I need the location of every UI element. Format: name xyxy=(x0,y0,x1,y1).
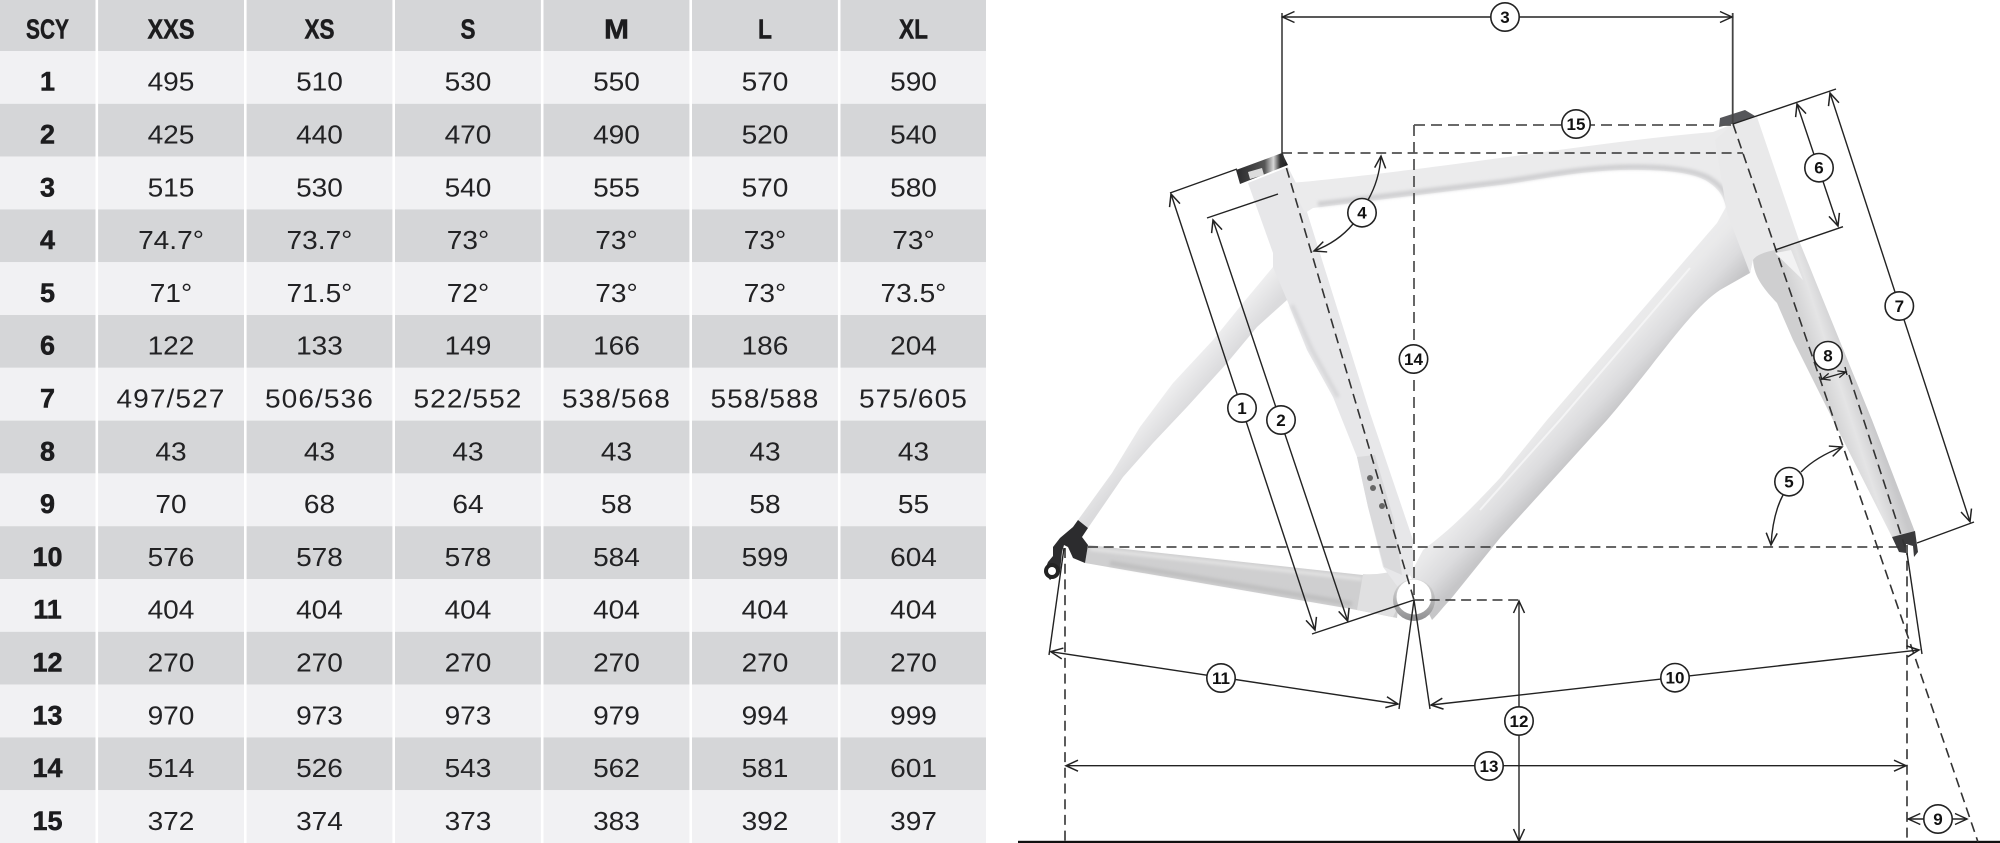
row 1: 590 xyxy=(890,68,937,96)
row 12: 270 xyxy=(148,648,194,677)
row 4: 73° xyxy=(447,226,489,255)
dimension 8 xyxy=(1814,342,1846,379)
row 14: 543 xyxy=(445,754,491,783)
fork xyxy=(1753,243,1915,537)
row 13: 999 xyxy=(890,701,937,730)
row 14: 601 xyxy=(890,754,937,783)
row 13: 970 xyxy=(148,701,194,730)
dimension 12: 12 xyxy=(1510,712,1528,731)
row 6: 133 xyxy=(296,332,343,360)
row 9: 55 xyxy=(898,490,929,519)
dimension 11: 11 xyxy=(1212,669,1230,688)
row 10: 584 xyxy=(593,543,640,572)
row 1: 530 xyxy=(445,68,491,96)
row 4 xyxy=(0,209,986,262)
row 4: 73° xyxy=(595,226,638,255)
dimension 12 xyxy=(1505,601,1533,841)
dimension 10 xyxy=(1431,650,1919,705)
row 3: 3 xyxy=(40,172,55,202)
row 10: 604 xyxy=(890,543,937,572)
row 7: 538/568 xyxy=(562,384,671,413)
header row: XL xyxy=(899,13,928,44)
row 14: 562 xyxy=(593,754,640,783)
dimension 9: 9 xyxy=(1933,810,1943,829)
dimension 13: 13 xyxy=(1480,757,1498,776)
row 12: 270 xyxy=(445,648,491,677)
row 7: 506/536 xyxy=(265,384,374,413)
row 5: 71.5° xyxy=(287,279,352,308)
row 6: 186 xyxy=(742,332,788,360)
row 7: 575/605 xyxy=(859,384,968,413)
row 15: 372 xyxy=(148,807,194,836)
chain stay xyxy=(1085,545,1402,618)
row 1: 510 xyxy=(296,68,343,96)
row 3: 555 xyxy=(593,173,640,202)
row 8: 43 xyxy=(155,437,187,466)
row 12: 12 xyxy=(32,648,63,678)
row 2: 540 xyxy=(890,120,937,149)
row 9: 68 xyxy=(304,490,335,519)
row 9: 58 xyxy=(601,490,632,519)
row 1: 550 xyxy=(593,68,640,96)
rear dropout and hanger xyxy=(1044,520,1088,580)
row 11: 404 xyxy=(890,596,937,624)
row 15: 392 xyxy=(742,807,788,836)
row 9: 70 xyxy=(155,490,187,519)
dimension 13 xyxy=(1066,752,1906,780)
row 8: 43 xyxy=(749,437,781,466)
reference dashed lines xyxy=(1065,124,1978,842)
dimension 5 xyxy=(1771,447,1842,545)
header row: L xyxy=(758,13,772,44)
row 2: 520 xyxy=(742,120,788,149)
row 11: 404 xyxy=(148,596,194,624)
row 15 xyxy=(0,790,986,843)
row 7: 522/552 xyxy=(413,384,523,413)
row 10: 10 xyxy=(32,542,63,572)
row 3: 530 xyxy=(296,173,343,202)
row 13 xyxy=(0,685,986,737)
dimension 7: 7 xyxy=(1895,297,1904,316)
dimension 14 xyxy=(1399,345,1428,373)
row 12: 270 xyxy=(890,648,937,677)
top tube xyxy=(1290,124,1760,220)
row 3: 580 xyxy=(890,173,937,202)
header row: XS xyxy=(304,13,334,44)
row 6: 149 xyxy=(445,332,491,360)
dimension 14: 14 xyxy=(1404,350,1423,369)
row 6: 122 xyxy=(148,332,194,360)
row 2: 490 xyxy=(593,120,640,149)
dimension 11 xyxy=(1051,652,1398,704)
dimension 6: 6 xyxy=(1814,159,1824,178)
row 12: 270 xyxy=(593,648,640,677)
row 3: 540 xyxy=(445,173,491,202)
row 11 xyxy=(0,579,986,632)
row 10: 578 xyxy=(296,543,343,572)
row 2: 440 xyxy=(296,120,343,149)
seat clamp xyxy=(1236,153,1288,184)
cable port dots xyxy=(1367,475,1385,509)
row 8: 43 xyxy=(898,437,929,466)
row 3: 515 xyxy=(148,173,194,202)
row 5: 73° xyxy=(744,279,786,308)
dimension 9 xyxy=(1908,805,1967,833)
dimension 3 xyxy=(1282,3,1732,31)
dimension 1 xyxy=(1171,194,1315,630)
row 10 xyxy=(0,526,986,579)
dimension 1: 1 xyxy=(1237,399,1247,418)
row 9: 58 xyxy=(749,490,781,519)
header row: XXS xyxy=(148,13,194,44)
dimension 7 xyxy=(1830,93,1970,522)
row 12: 270 xyxy=(296,648,343,677)
row 15: 373 xyxy=(445,807,491,836)
row 15: 397 xyxy=(890,807,937,836)
dimension 10: 10 xyxy=(1666,669,1684,688)
row 3: 570 xyxy=(742,173,788,202)
dimension 3: 3 xyxy=(1500,8,1510,27)
header row: M xyxy=(604,13,629,44)
row 5: 73.5° xyxy=(881,279,946,308)
row 13: 973 xyxy=(445,701,491,730)
row 8: 43 xyxy=(601,437,632,466)
row 13: 13 xyxy=(32,700,63,730)
row 15: 15 xyxy=(32,806,63,836)
row 15: 374 xyxy=(296,807,343,836)
row 9: 64 xyxy=(452,490,484,519)
dimension 8: 8 xyxy=(1823,347,1833,366)
row 8: 8 xyxy=(40,436,55,466)
row 4: 73° xyxy=(744,226,786,255)
row 5 xyxy=(0,262,986,315)
row 4: 73.7° xyxy=(287,226,352,255)
row 4: 73° xyxy=(892,226,935,255)
row 1: 495 xyxy=(148,68,194,96)
row 13: 973 xyxy=(296,701,343,730)
row 2: 425 xyxy=(148,120,194,149)
row 2: 2 xyxy=(40,120,55,150)
row 2 xyxy=(0,104,986,157)
row 3 xyxy=(0,157,986,209)
dimension 15 xyxy=(1562,110,1590,138)
row 10: 599 xyxy=(742,543,788,572)
row 11: 404 xyxy=(296,596,343,624)
row 7: 7 xyxy=(40,384,55,414)
row 9 xyxy=(0,473,986,526)
row 12 xyxy=(0,632,986,685)
row 5: 5 xyxy=(40,278,55,308)
seat tube xyxy=(1248,167,1413,590)
row 14: 514 xyxy=(148,754,194,783)
row 14: 581 xyxy=(742,754,788,783)
row 8: 43 xyxy=(304,437,335,466)
dimension 6 xyxy=(1797,104,1838,226)
row 11: 404 xyxy=(742,596,788,624)
row 1: 570 xyxy=(742,68,788,96)
dimension 2: 2 xyxy=(1276,411,1286,430)
row 5: 73° xyxy=(595,279,638,308)
row 7: 558/588 xyxy=(710,384,820,413)
row 1: 1 xyxy=(40,67,55,97)
fork dropout xyxy=(1892,531,1918,557)
row 7: 497/527 xyxy=(116,384,226,413)
seat stay xyxy=(1078,253,1297,528)
bicycle frame xyxy=(1044,110,1918,621)
dimension 4: 4 xyxy=(1357,204,1367,223)
headset cap xyxy=(1719,110,1755,127)
row 9: 9 xyxy=(40,489,55,519)
row 2: 470 xyxy=(445,120,491,149)
row 8: 43 xyxy=(452,437,484,466)
row 11: 11 xyxy=(33,595,62,625)
header row xyxy=(0,0,986,51)
row 4: 4 xyxy=(40,225,55,255)
dimension 2 xyxy=(1213,220,1348,621)
row 14 xyxy=(0,737,986,790)
head tube xyxy=(1715,117,1800,273)
dimension 5: 5 xyxy=(1784,473,1794,492)
ground line xyxy=(1018,841,2000,843)
row 6: 204 xyxy=(890,332,937,360)
dimension 15: 15 xyxy=(1567,115,1585,134)
row 8 xyxy=(0,421,986,473)
row 6 xyxy=(0,315,986,368)
row 10: 578 xyxy=(445,543,491,572)
bottom bracket shell xyxy=(1393,579,1435,621)
row 13: 994 xyxy=(742,701,788,730)
row 14: 14 xyxy=(32,753,63,783)
dimension 4 xyxy=(1314,156,1381,251)
extension lines xyxy=(1049,13,1974,709)
row 5: 71° xyxy=(150,279,192,308)
header row: SCY xyxy=(26,13,69,44)
row 5: 72° xyxy=(447,279,489,308)
row 13: 979 xyxy=(593,701,640,730)
row 1 xyxy=(0,51,986,104)
row 15: 383 xyxy=(593,807,640,836)
row 14: 526 xyxy=(296,754,343,783)
header row: S xyxy=(460,13,476,44)
row 6: 166 xyxy=(593,332,640,360)
row 7 xyxy=(0,368,986,421)
row 11: 404 xyxy=(593,596,640,624)
row 10: 576 xyxy=(148,543,194,572)
row 12: 270 xyxy=(742,648,788,677)
down tube xyxy=(1410,200,1770,620)
row 11: 404 xyxy=(445,596,491,624)
row 6: 6 xyxy=(40,331,55,361)
row 4: 74.7° xyxy=(138,226,204,255)
geometry table xyxy=(0,0,986,843)
measurement lines xyxy=(1018,3,2000,843)
